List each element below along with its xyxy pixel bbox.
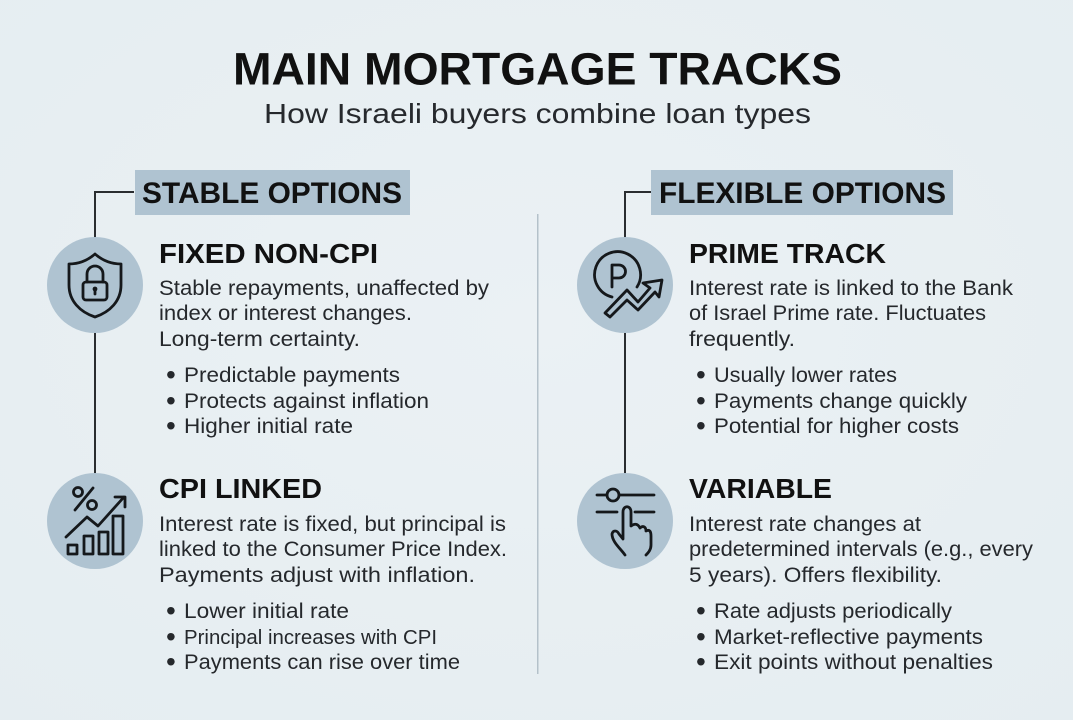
- bullets: variable: •: [696, 595, 706, 626]
- card: prime track: PRIME TRACK: [689, 238, 886, 269]
- bullets: variable: Rate adjusts periodically: [714, 600, 953, 623]
- bullets: fixed non-CPI: Predictable payments: [184, 364, 400, 387]
- description: CPI linked: Interest rate is fixed, but principal is: [159, 513, 506, 536]
- bullets: prime track: •: [696, 385, 706, 416]
- bullets: CPI linked: Lower initial rate: [184, 600, 349, 623]
- bullets: fixed non-CPI: •: [166, 359, 176, 390]
- description: prime track: of Israel Prime rate. Fluctuates: [689, 302, 986, 325]
- card: CPI linked: CPI LINKED: [159, 473, 322, 504]
- icon: shield with padlock: [47, 237, 143, 333]
- bullets: CPI linked: Payments can rise over time: [184, 651, 460, 674]
- bullets: variable: Exit points without penalties: [714, 651, 993, 674]
- title: MAIN MORTGAGE TRACKS: [233, 44, 842, 94]
- description: fixed non-CPI: [159, 277, 490, 351]
- card: fixed non-CPI: FIXED NON-CPI: [159, 238, 378, 269]
- bullets: fixed non-CPI: Higher initial rate: [184, 415, 353, 438]
- icon: prime P with rising arrow: [577, 237, 673, 333]
- bullets: CPI linked: •: [166, 621, 176, 652]
- description: CPI linked: Payments adjust with inflation.: [159, 564, 475, 587]
- bullets: prime track: Usually lower rates: [714, 364, 897, 387]
- card: CPI linked: [159, 473, 507, 677]
- description: variable: [689, 513, 1034, 587]
- bullets: prime track: •: [696, 359, 706, 390]
- bullets: variable: •: [696, 646, 706, 677]
- bullets: fixed non-CPI: •: [166, 410, 176, 441]
- description: prime track: frequently.: [689, 328, 795, 351]
- heading: stable options: [135, 170, 410, 215]
- subtitle: How Israeli buyers combine loan types: [264, 98, 811, 129]
- description: fixed non-CPI: Long-term certainty.: [159, 328, 360, 351]
- bullets: CPI linked: Principal increases with CPI: [184, 627, 437, 649]
- bullets: fixed non-CPI: Protects against inflation: [184, 390, 429, 413]
- card: variable: VARIABLE: [689, 473, 832, 504]
- icon: percent and growth chart: [47, 473, 143, 569]
- bullets: CPI linked: •: [166, 646, 176, 677]
- heading: flexible options: FLEXIBLE OPTIONS: [659, 177, 946, 210]
- card: variable: [689, 473, 1034, 677]
- description: variable: 5 years). Offers flexibility.: [689, 564, 942, 587]
- bullets: variable: [696, 595, 993, 677]
- bullets: CPI linked: •: [166, 595, 176, 626]
- bullets: prime track: Potential for higher costs: [714, 415, 959, 438]
- description: fixed non-CPI: Stable repayments, unaffected by: [159, 277, 490, 300]
- description: prime track: Interest rate is linked to the Bank: [689, 277, 1014, 300]
- bullets: variable: Market-reflective payments: [714, 626, 983, 649]
- heading: stable options: STABLE OPTIONS: [142, 177, 402, 210]
- bullets: fixed non-CPI: [166, 359, 429, 441]
- description: variable: Interest rate changes at: [689, 513, 921, 536]
- bullets: prime track: Payments change quickly: [714, 390, 968, 413]
- description: fixed non-CPI: index or interest changes.: [159, 302, 412, 325]
- bullets: variable: •: [696, 621, 706, 652]
- icon: slider and pointing hand: [577, 473, 673, 569]
- card: prime track: [689, 238, 1014, 441]
- description: prime track: [689, 277, 1014, 351]
- panel: stable options: [47, 170, 507, 677]
- panel: flexible options: [577, 170, 1034, 677]
- description: CPI linked: linked to the Consumer Price Index.: [159, 538, 507, 561]
- bullets: prime track: •: [696, 410, 706, 441]
- bullets: CPI linked: [166, 595, 460, 677]
- bullets: prime track: [696, 359, 968, 441]
- description: variable: predetermined intervals (e.g., every: [689, 538, 1034, 561]
- description: CPI linked: [159, 513, 507, 587]
- card: fixed non-CPI: [159, 238, 490, 441]
- bullets: fixed non-CPI: •: [166, 385, 176, 416]
